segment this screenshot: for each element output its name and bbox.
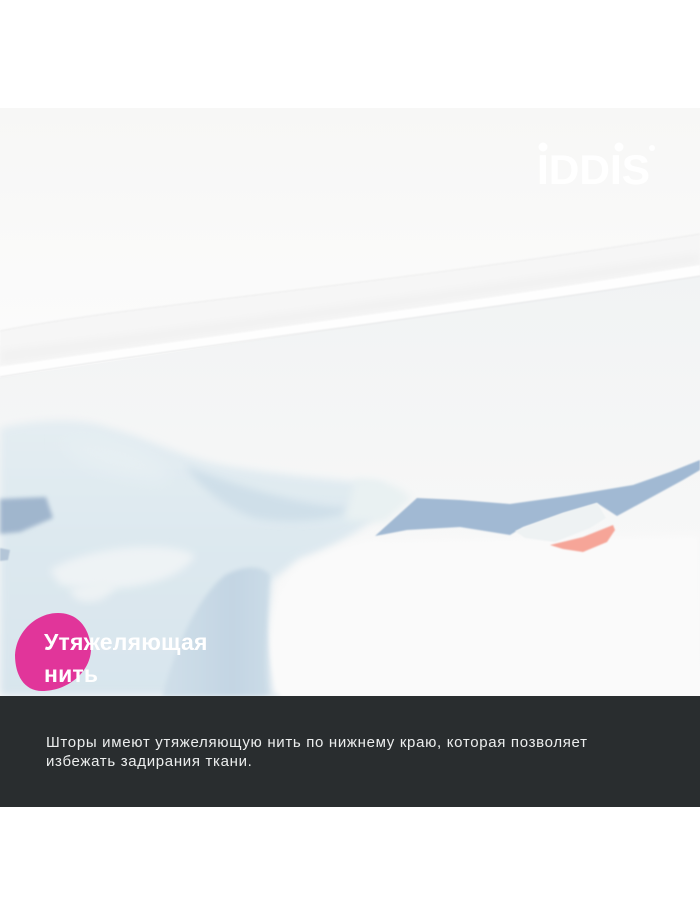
beak pale patch	[515, 503, 606, 542]
neck shadow	[162, 568, 280, 696]
body shading band	[191, 470, 342, 520]
description text: избежать задирания ткани.	[46, 753, 253, 770]
hem fold	[0, 272, 636, 378]
wing dark marks	[0, 497, 53, 534]
pink blob	[15, 613, 91, 691]
lower fabric	[0, 278, 700, 536]
beak blue stroke	[375, 460, 700, 536]
upper fabric	[0, 108, 700, 152]
photo: curtain fabric with watercolor bird print	[0, 108, 700, 807]
logo: IDDIS: IDDIS	[537, 146, 650, 193]
heading: нить	[44, 661, 98, 687]
description text: Шторы имеют утяжеляющую нить по нижнему краю, которая позволяет	[46, 734, 588, 751]
body pale patches	[50, 547, 195, 589]
heading	[44, 629, 208, 687]
heading: Утяжеляющая	[44, 629, 208, 655]
white breast	[266, 628, 280, 696]
description text	[46, 734, 588, 770]
dark caption band	[0, 696, 700, 807]
beak red tip	[550, 525, 615, 552]
watercolor body	[0, 420, 395, 696]
